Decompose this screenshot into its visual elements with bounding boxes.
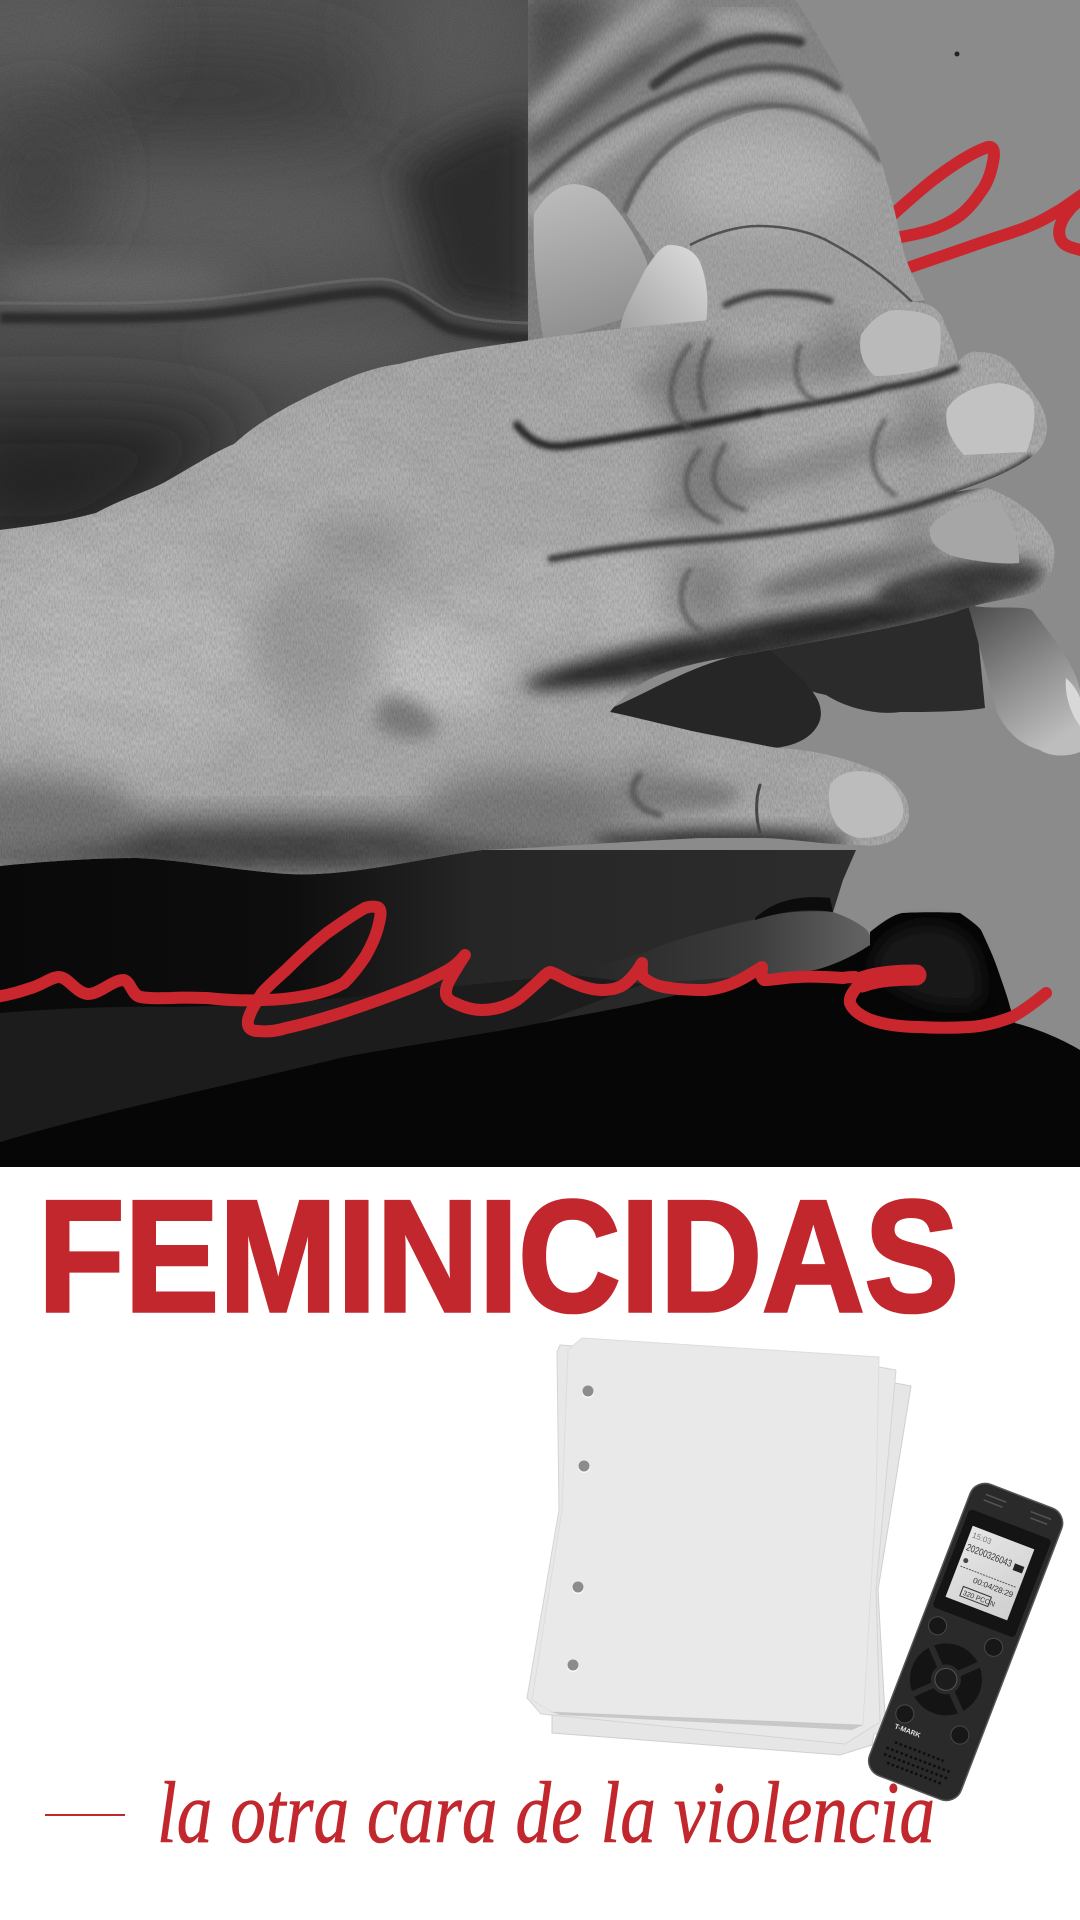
recorder speaker grille xyxy=(882,1740,953,1785)
recorder brand: T-MARK xyxy=(893,1723,921,1740)
recorder body xyxy=(864,1479,1067,1805)
top sheet xyxy=(532,1338,879,1725)
back sheet xyxy=(552,1383,911,1755)
illustration: stack of loose paper sheets xyxy=(527,1338,911,1755)
panel: black and white photo of clasped hands xyxy=(0,0,1080,1167)
recorder screen xyxy=(946,1526,1034,1620)
photo: fingernails xyxy=(829,310,1034,838)
red signature stroke: lower xyxy=(0,907,1046,1031)
punch holes xyxy=(567,1386,594,1672)
photo: shirt seam xyxy=(0,279,535,338)
photo: lit fold strip at left xyxy=(0,975,643,1142)
photo: finger pointing down at right xyxy=(600,605,1080,756)
photo: main hand xyxy=(0,290,1080,890)
title: FEMINICIDAS xyxy=(38,1167,959,1345)
photo: sleeve and forearm xyxy=(520,0,928,345)
subtitle dash xyxy=(45,1814,125,1816)
photo: forearm skin xyxy=(627,108,925,325)
photo: black knee in foreground xyxy=(0,912,1080,1167)
photo: wrist crease lines xyxy=(690,226,912,306)
recorder d-pad xyxy=(880,1614,1012,1745)
photo: thumbs behind the hand xyxy=(534,184,707,342)
middle sheet xyxy=(527,1345,896,1744)
photo: dark shirt xyxy=(0,0,535,560)
photo: creases between fingers xyxy=(517,340,1030,832)
recorder screen: 320 PCON xyxy=(962,1590,996,1609)
photo: clothing under the hand xyxy=(0,850,871,1142)
recorder screen: 20200326043 xyxy=(965,1542,1014,1570)
photo: dark knuckle shading xyxy=(613,309,943,814)
photo: hand shading xyxy=(0,326,1048,874)
illustration: digital voice recorder xyxy=(858,1476,1067,1805)
photo: fold under the hand xyxy=(667,911,870,982)
recorder screen: 00:04/28:29 xyxy=(972,1576,1015,1600)
recorder side buttons xyxy=(892,1614,1005,1747)
photo: grey wall background xyxy=(0,0,1080,1167)
recorder screen: 15:03 xyxy=(971,1531,993,1546)
red signature stroke: upper right xyxy=(880,147,1080,269)
recorder top bezel xyxy=(932,1491,1059,1638)
